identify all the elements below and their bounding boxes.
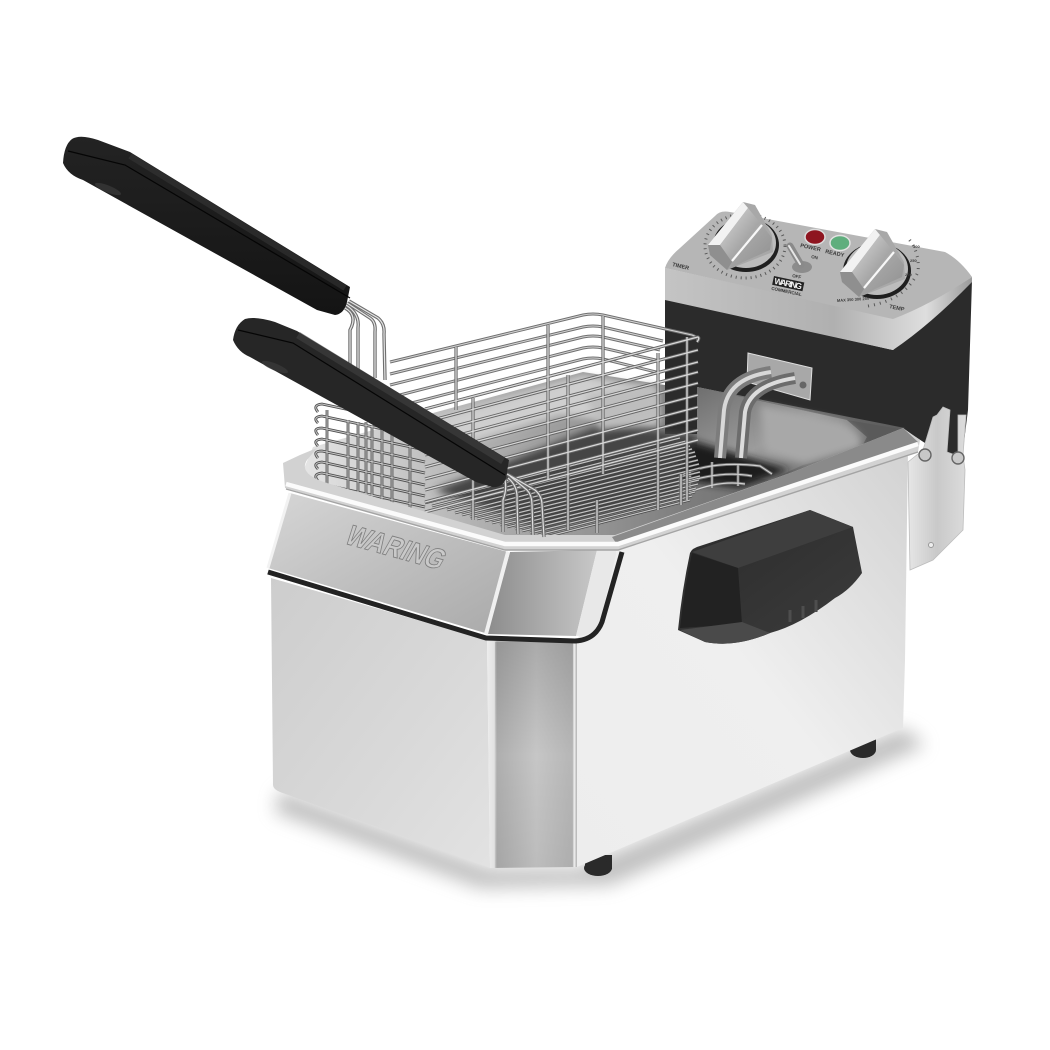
front basket hanger wires bbox=[503, 474, 544, 537]
basket rest in well bbox=[680, 462, 772, 498]
fryer tank interior bbox=[300, 372, 905, 538]
brand badge: COMMERCIAL bbox=[771, 286, 802, 297]
front pipe bbox=[741, 378, 795, 458]
timer knob bbox=[708, 202, 773, 270]
control labels bbox=[672, 243, 920, 313]
hinge bracket bbox=[908, 407, 966, 570]
control head: front bevel bbox=[665, 268, 972, 350]
embossed WARING logo: WARING bbox=[340, 520, 452, 576]
control labels: OFF bbox=[792, 273, 802, 280]
control labels: READY bbox=[825, 249, 845, 259]
basket floor wires bbox=[425, 438, 700, 537]
lower basket handle bbox=[233, 318, 509, 487]
temperature dial bbox=[840, 229, 918, 306]
hinge screws bbox=[919, 449, 931, 461]
control head: top face bbox=[665, 212, 972, 319]
control labels: TIMER bbox=[672, 262, 690, 272]
floor shadow bbox=[275, 728, 925, 888]
control labels: 250 bbox=[910, 258, 917, 263]
power light bbox=[805, 230, 825, 244]
rear pipe bbox=[720, 372, 771, 458]
side carry handle bbox=[678, 510, 862, 644]
tank rim bbox=[283, 428, 920, 550]
oil well bbox=[680, 387, 905, 498]
right body face bbox=[577, 450, 908, 867]
basket back and side wires bbox=[390, 314, 698, 407]
basket left end wires bbox=[316, 404, 425, 510]
control head bbox=[665, 202, 972, 350]
toggle switch bbox=[789, 246, 812, 273]
basket front wires and verticals bbox=[425, 316, 699, 533]
control labels: TEMP bbox=[889, 304, 905, 313]
mounting plate bbox=[747, 353, 812, 400]
temperature knob bbox=[840, 229, 905, 297]
black gasket line bbox=[268, 552, 622, 641]
front body: lower left face bbox=[271, 578, 490, 868]
timer dial bbox=[705, 202, 785, 278]
control labels: 300 bbox=[913, 244, 920, 249]
fry basket bbox=[316, 314, 700, 537]
control labels: 200 bbox=[905, 272, 912, 277]
brand badge: WARING bbox=[773, 276, 803, 292]
rear basket hanger wires bbox=[345, 301, 385, 380]
front band with logo bbox=[268, 493, 508, 633]
control labels: ON bbox=[811, 254, 818, 260]
heating element mount and pipes bbox=[720, 353, 812, 458]
corner band bbox=[486, 550, 617, 636]
front body: corner chamfer bbox=[487, 640, 577, 868]
control labels: MAX 350 300 250 bbox=[837, 296, 870, 303]
feet bbox=[584, 738, 876, 876]
upper basket handle bbox=[63, 137, 350, 315]
ready light bbox=[830, 236, 850, 250]
control labels: POWER bbox=[800, 243, 821, 253]
brand badge bbox=[771, 276, 805, 297]
control housing: black back panel bbox=[665, 280, 972, 458]
perforated strainer plate bbox=[585, 384, 660, 430]
